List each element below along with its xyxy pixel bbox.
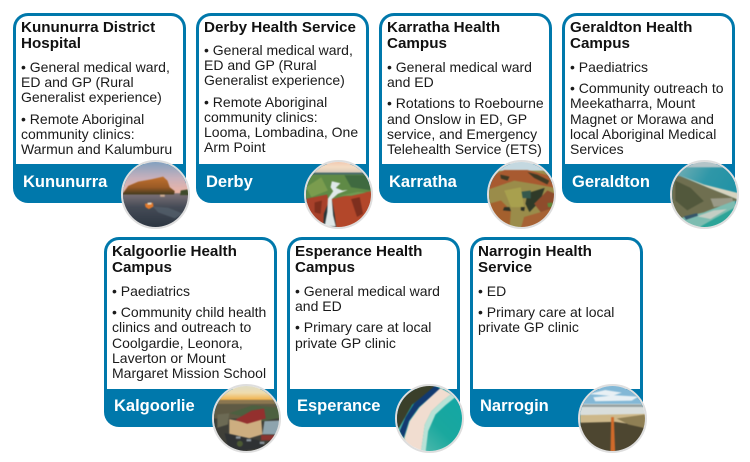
heading: Karratha Health Campus: Campus: [387, 35, 447, 52]
heading: Esperance Health Campus: Esperance Health: [295, 243, 422, 260]
text: Kununurra placement details: [21, 58, 172, 157]
card: Derby: [196, 13, 369, 203]
photo: Esperance beach aerial: [395, 384, 464, 453]
label: Narrogin: Narrogin: [480, 397, 549, 415]
text: Derby placement details: Arm Point: [204, 139, 265, 155]
heading: Kununurra District Hospital: Kununurra District: [21, 19, 155, 36]
text: Karratha placement details: and Onslow in ED, GP: [387, 111, 527, 127]
text: Kununurra placement details: community clinics:: [21, 126, 135, 142]
photo: Kununurra mesa and river: [121, 160, 190, 229]
text: Karratha placement details: [387, 58, 544, 157]
text: Esperance placement details: • General medical ward: [295, 282, 440, 298]
text: Geraldton placement details: Services: [570, 141, 624, 157]
heading: Esperance Health Campus: [295, 243, 422, 276]
heading: Geraldton Health Campus: Campus: [570, 35, 630, 52]
heading: Narrogin Health Service: Narrogin Health: [478, 243, 592, 260]
text: Kununurra placement details: Warmun and Kalumburu: [21, 141, 172, 157]
text: Kununurra placement details: • Remote Aboriginal: [21, 111, 144, 127]
text: Kalgoorlie placement details: Coolgardie, Leonora,: [112, 335, 243, 351]
text: Derby placement details: • General medical ward,: [204, 42, 353, 58]
card: Geraldton: [562, 13, 735, 203]
text: Karratha placement details: service, and Emergency: [387, 126, 537, 142]
label: Kalgoorlie: Kalgoorlie: [114, 397, 195, 415]
text: Derby placement details: Looma, Lombadina, One: [204, 124, 358, 140]
heading: Geraldton Health Campus: Geraldton Health: [570, 19, 692, 36]
text: Kununurra placement details: ED and GP (Rural: [21, 74, 134, 90]
text: Narrogin placement details: • ED: [478, 282, 506, 298]
text: Kalgoorlie placement details: • Community child health: [112, 304, 266, 320]
text: Derby placement details: Generalist experience): [204, 72, 345, 88]
text: Geraldton placement details: Meekatharra, Mount: [570, 95, 695, 111]
label: Derby: Derby: [206, 173, 253, 191]
label: Geraldton: Geraldton: [572, 173, 650, 191]
photo: Narrogin salt lake and road: [578, 384, 647, 453]
text: Esperance placement details: and ED: [295, 298, 342, 314]
text: Narrogin placement details: [478, 282, 614, 335]
heading: Kununurra District Hospital: Hospital: [21, 35, 81, 52]
photo: Karratha red hills: [487, 160, 556, 229]
heading: Kalgoorlie Health Campus: Kalgoorlie Health: [112, 243, 237, 260]
text: Kalgoorlie placement details: Margaret Mission School: [112, 365, 266, 381]
text: Narrogin placement details: • Primary care at local: [478, 304, 614, 320]
heading: Kalgoorlie Health Campus: [112, 243, 237, 276]
heading: Kalgoorlie Health Campus: Campus: [112, 259, 172, 276]
text: Narrogin placement details: private GP clinic: [478, 319, 579, 335]
card: Esperance: [287, 237, 460, 427]
text: Kalgoorlie placement details: Laverton or Mount: [112, 350, 226, 366]
text: Kununurra placement details: • General medical ward,: [21, 58, 170, 74]
text: Geraldton placement details: • Paediatrics: [570, 58, 648, 74]
text: Esperance placement details: • Primary care at local: [295, 319, 431, 335]
text: Derby placement details: • Remote Aboriginal: [204, 94, 327, 110]
text: Karratha placement details: • General medical ward: [387, 58, 532, 74]
label: Kununurra: Kununurra: [23, 173, 107, 191]
text: Kalgoorlie placement details: [112, 282, 266, 381]
text: Kalgoorlie placement details: clinics and outreach to: [112, 319, 251, 335]
text: Karratha placement details: and ED: [387, 74, 434, 90]
heading: Geraldton Health Campus: [570, 19, 692, 52]
label: Karratha: Karratha: [389, 173, 457, 191]
card: Karratha: [379, 13, 552, 203]
card: Kununurra: [13, 13, 186, 203]
photo: Kalgoorlie town building: [212, 384, 281, 453]
heading: Narrogin Health Service: Service: [478, 259, 532, 276]
text: Kalgoorlie placement details: • Paediatrics: [112, 282, 190, 298]
heading: Karratha Health Campus: Karratha Health: [387, 19, 500, 36]
text: Derby placement details: ED and GP (Rural: [204, 57, 317, 73]
text: Geraldton placement details: • Community outreach to: [570, 80, 724, 96]
text: Karratha placement details: • Rotations to Roebourne: [387, 95, 544, 111]
heading: Narrogin Health Service: [478, 243, 592, 276]
text: Derby placement details: [204, 42, 358, 155]
text: Derby placement details: community clinics:: [204, 109, 318, 125]
heading: Derby Health Service: Derby Health Service: [204, 19, 356, 36]
text: Geraldton placement details: [570, 58, 724, 157]
heading: Kununurra District Hospital: [21, 19, 155, 52]
heading: Esperance Health Campus: Campus: [295, 259, 355, 276]
text: Esperance placement details: [295, 282, 440, 351]
text: Geraldton placement details: Magnet or Morawa and: [570, 111, 714, 127]
photo: Geraldton coastline: [670, 160, 739, 229]
heading: Karratha Health Campus: [387, 19, 500, 52]
text: Karratha placement details: Telehealth Service (ETS): [387, 141, 542, 157]
card: Kalgoorlie: [104, 237, 277, 427]
card: Narrogin: [470, 237, 643, 427]
text: Geraldton placement details: local Aboriginal Medical: [570, 126, 716, 142]
photo: Derby gorge waterfall: [304, 160, 373, 229]
text: Kununurra placement details: Generalist experience): [21, 89, 162, 105]
label: Esperance: Esperance: [297, 397, 380, 415]
text: Esperance placement details: private GP clinic: [295, 335, 396, 351]
